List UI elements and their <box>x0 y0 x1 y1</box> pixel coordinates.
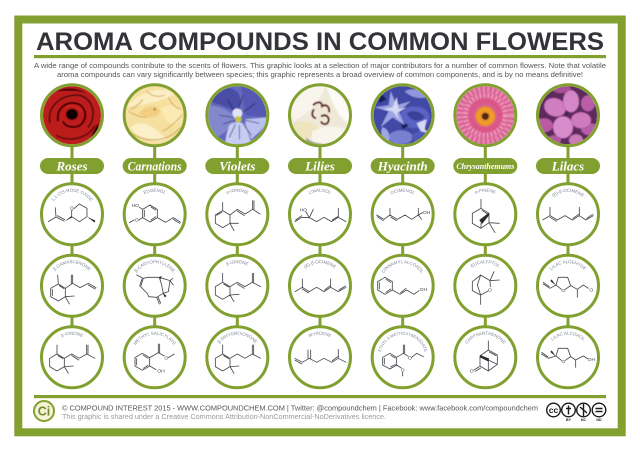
label: Lilies: Lilies <box>304 158 335 173</box>
compound: eugenol: EUGENOL <box>143 188 165 194</box>
compound: beta-ionone: β-IONONE <box>61 332 84 338</box>
compound: eugenol: HO <box>132 203 139 209</box>
compound: beta-damascenone <box>40 254 104 318</box>
flower: lilac <box>535 85 599 146</box>
logo: Ci: Ci <box>38 404 50 418</box>
footer text <box>62 404 538 421</box>
compound: lilac aldehyde: LILAC ALDEHYDE <box>550 260 586 270</box>
compound: beta-ionone <box>40 325 104 390</box>
compound: beta-damascenone: β-DAMASCENONE <box>53 260 91 272</box>
compound: beta-ionone (violets): β-IONONE <box>226 260 248 266</box>
compound: chrysanthenone: O <box>470 369 474 375</box>
licence icons: cc <box>549 405 558 415</box>
label: Violets: Violets <box>219 158 255 173</box>
compound: beta-ocimene (lilies): (E)-β-OCIMENE <box>304 260 336 269</box>
label: Hyacinth: Hyacinth <box>377 158 428 173</box>
licence icons: ND <box>596 418 602 422</box>
compound: eucalyptol: O <box>488 288 492 294</box>
compound: lilac aldehyde <box>536 254 600 318</box>
compound: beta-caryophyllene <box>122 254 187 318</box>
compound: lilac aldehyde: O <box>561 288 565 294</box>
compound: beta-caryophyllene: β-CARYOPHYLLENE <box>134 260 176 273</box>
compound: linalool: HO <box>300 207 307 213</box>
compound: ethyl 2-methoxybenzoate <box>370 325 435 390</box>
intro text <box>34 61 606 79</box>
compound: ocimenol: OH <box>423 210 431 216</box>
label: Lilacs <box>536 158 600 174</box>
compound: myrcene: MYRCENE <box>308 332 332 338</box>
label: Roses <box>40 158 104 174</box>
compound: eugenol: O <box>135 218 139 224</box>
licence icons: NC <box>581 418 586 422</box>
compound: alpha-pinene <box>453 182 518 246</box>
licence icons: BY <box>566 418 572 422</box>
logo: Ci <box>34 401 54 421</box>
compound: ocimenol: OCIMENOL <box>390 188 414 194</box>
compound: beta-ocimene (lilies) <box>288 254 352 318</box>
compound: myrcene <box>288 325 352 390</box>
label: Lilacs: Lilacs <box>551 158 584 173</box>
compound: alpha-ionone <box>205 182 270 246</box>
compound: eucalyptol: EUCALYPTOL <box>470 260 499 268</box>
compound: chrysanthenone: CHRYSANTHENONE <box>465 332 506 344</box>
compound: cinnamyl alcohol: OH <box>420 287 427 293</box>
label: Roses: Roses <box>55 158 88 173</box>
intro text: A wide range of compounds contribute to the scents of flowers. This graphic looks at a selection of major contributors for a number of common flowers. Note that volatile <box>34 61 606 70</box>
compound: beta-ionone (violets) <box>205 254 270 318</box>
flower: chrysanthemum <box>455 85 516 146</box>
compound: lilac alcohol: OH <box>588 357 595 363</box>
compound: lilac alcohol: LILAC ALCOHOL <box>550 332 584 341</box>
compound: chrysanthenone <box>453 325 518 390</box>
compound: methyl salicylate: O <box>164 356 168 362</box>
label: Lilies <box>288 158 352 174</box>
compound: cinnamyl alcohol: CINNAMYL ALCOHOL <box>382 260 423 274</box>
compound: lilac alcohol: O <box>561 359 565 365</box>
compound: lilac aldehyde: O <box>589 287 593 293</box>
flower: violet <box>207 85 268 146</box>
compound: eugenol <box>122 182 187 246</box>
compound: ocimenol <box>370 182 435 246</box>
compound: beta-ocimene (lilacs) <box>536 182 600 246</box>
compound: rose oxide <box>40 182 104 246</box>
compound: dihydro-beta-ionone <box>205 325 270 390</box>
compound: dihydro-beta-ionone: β-DIHYDROIONONE <box>218 332 258 344</box>
flower: rose <box>42 85 102 146</box>
footer text: This graphic is shared under a Creative Commons Attribution-NonCommercial-NoDerivatives licence. <box>62 412 386 421</box>
compound: eucalyptol <box>453 254 518 318</box>
flower: lily <box>290 85 350 146</box>
compound: linalool <box>288 182 352 246</box>
compound: ethyl 2-methoxybenzoate: O <box>401 367 405 373</box>
title: AROMA COMPOUNDS IN COMMON FLOWERS <box>36 28 604 56</box>
compound: ethyl 2-methoxybenzoate: O <box>408 355 412 361</box>
compound: rose oxide: 1,1-CIS-ROSE OXIDE <box>52 188 93 202</box>
compound: methyl salicylate: OH <box>157 368 165 374</box>
flower: carnation <box>124 85 185 146</box>
compound: methyl salicylate: METHYL SALICYLATE <box>134 332 176 345</box>
label: Carnations: Carnations <box>128 158 182 173</box>
licence icons <box>547 403 606 422</box>
title rule <box>34 55 606 58</box>
intro text: aroma compounds can vary significantly between species; this graphic represents a broad overview of common components, and is by no means definitive! <box>57 70 583 79</box>
compound: lilac alcohol <box>536 325 600 390</box>
compound: beta-ocimene (lilacs): (E)-β-OCIMENE <box>552 188 584 198</box>
compound: alpha-pinene: α-PINENE <box>475 188 496 194</box>
flower: hyacinth <box>372 85 433 146</box>
column connectors <box>70 145 570 345</box>
label: Chrysanthemums <box>453 158 517 174</box>
compound: alpha-ionone: α-IONONE <box>226 188 248 194</box>
compound: ethyl 2-methoxybenzoate: ETHYL 2-METHOXYBENZOATE <box>378 332 428 352</box>
footer rule <box>34 395 606 398</box>
compound: methyl salicylate <box>122 325 187 390</box>
compound: rose oxide: O <box>70 205 74 211</box>
label: Violets <box>205 158 269 174</box>
label: Chrysanthemums: Chrysanthemums <box>456 161 515 171</box>
compound: cinnamyl alcohol <box>370 254 435 318</box>
footer text: © COMPOUND INTEREST 2015 - WWW.COMPOUNDCHEM.COM | Twitter: @compoundchem | Facebook: www.facebook.com/compoundchem <box>62 404 538 412</box>
compound: linalool: LINALOOL <box>308 188 330 194</box>
